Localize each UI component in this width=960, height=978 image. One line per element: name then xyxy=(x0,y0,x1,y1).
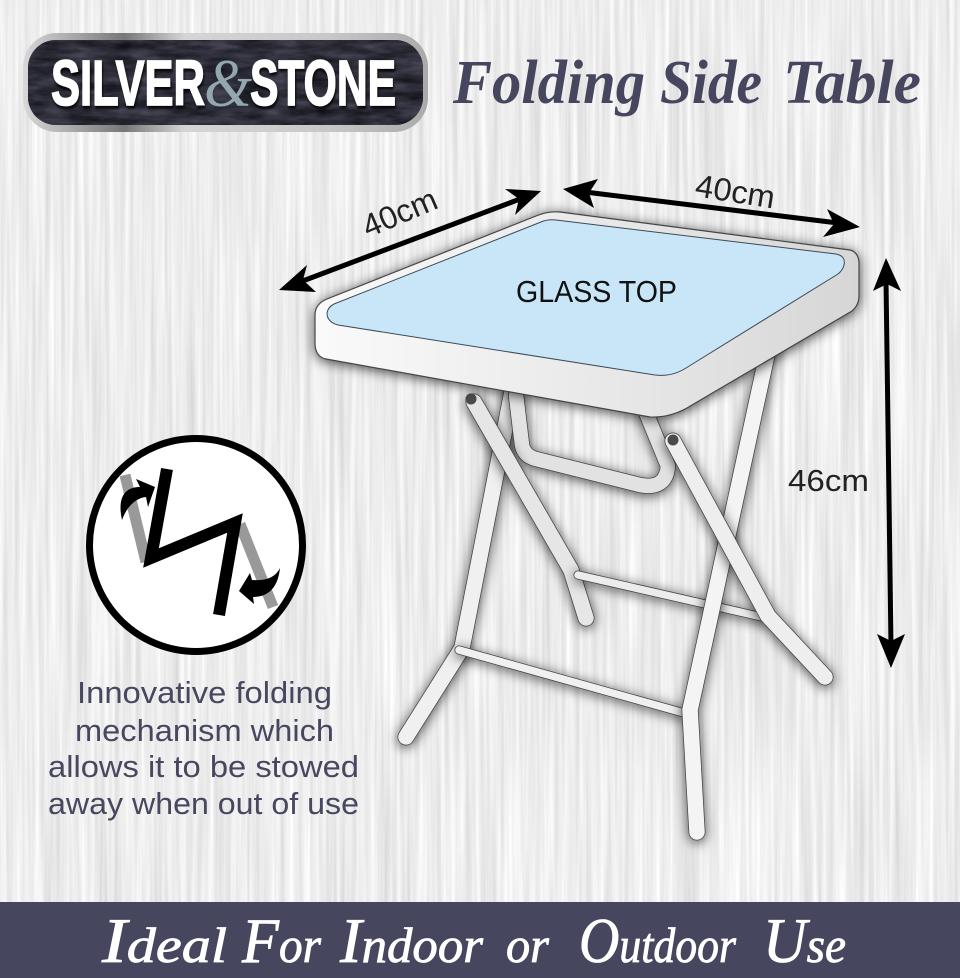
logo: Silver & Stone: SILVER xyxy=(51,47,205,119)
glass panel xyxy=(327,220,844,375)
dimension label: left 40cm: 40cm xyxy=(357,181,443,244)
lower crossbar xyxy=(459,650,684,713)
dimension arrow: height xyxy=(873,258,905,668)
upper crossbar xyxy=(578,575,762,617)
title: Table xyxy=(783,49,921,117)
dimension arrow: left width xyxy=(279,189,541,292)
rotation arrow lower xyxy=(239,568,280,604)
black zigzag leg xyxy=(151,469,235,615)
footer tagline: Outdoor xyxy=(579,905,736,976)
logo: Silver & Stone: STONE xyxy=(250,47,396,119)
footer tagline: Use xyxy=(763,905,846,976)
dimension arrow: right width xyxy=(563,179,860,237)
folding mechanism description: Innovative folding xyxy=(77,675,332,710)
footer tagline: Ideal xyxy=(101,905,227,976)
logo: Silver & Stone xyxy=(23,33,428,132)
footer tagline: or xyxy=(506,917,550,973)
grey folded position left xyxy=(125,475,146,562)
title: Folding xyxy=(452,49,645,117)
folding mechanism description: away when out of use xyxy=(48,786,359,821)
folding mechanism icon xyxy=(90,438,302,652)
rotation arrow upper xyxy=(121,479,155,520)
table top rim xyxy=(315,212,859,417)
folding mechanism description xyxy=(48,675,359,821)
footer tagline: For xyxy=(241,905,322,976)
table illustration xyxy=(315,212,859,832)
dimension label: 46cm: 46cm xyxy=(788,463,869,498)
footer tagline: Indoor xyxy=(339,905,484,976)
leg: front right xyxy=(690,350,768,832)
folding mechanism description: mechanism which xyxy=(75,713,334,748)
folding bracket xyxy=(516,395,668,486)
leg: rear left xyxy=(474,402,586,618)
grey folded position right xyxy=(240,524,273,607)
label: glass top: GLASS TOP xyxy=(516,274,677,309)
logo: Silver & Stone: & xyxy=(204,45,252,121)
footer tagline xyxy=(101,905,846,976)
title: Side xyxy=(660,49,762,117)
leg: rear right xyxy=(673,441,825,677)
footer band xyxy=(0,902,960,978)
dimension label: right 40cm: 40cm xyxy=(693,167,778,215)
title xyxy=(452,49,921,117)
pivot bolt right xyxy=(668,434,678,446)
pivot bolt left xyxy=(466,394,476,404)
leg: front left xyxy=(406,392,512,737)
folding mechanism description: allows it to be stowed xyxy=(48,749,359,784)
